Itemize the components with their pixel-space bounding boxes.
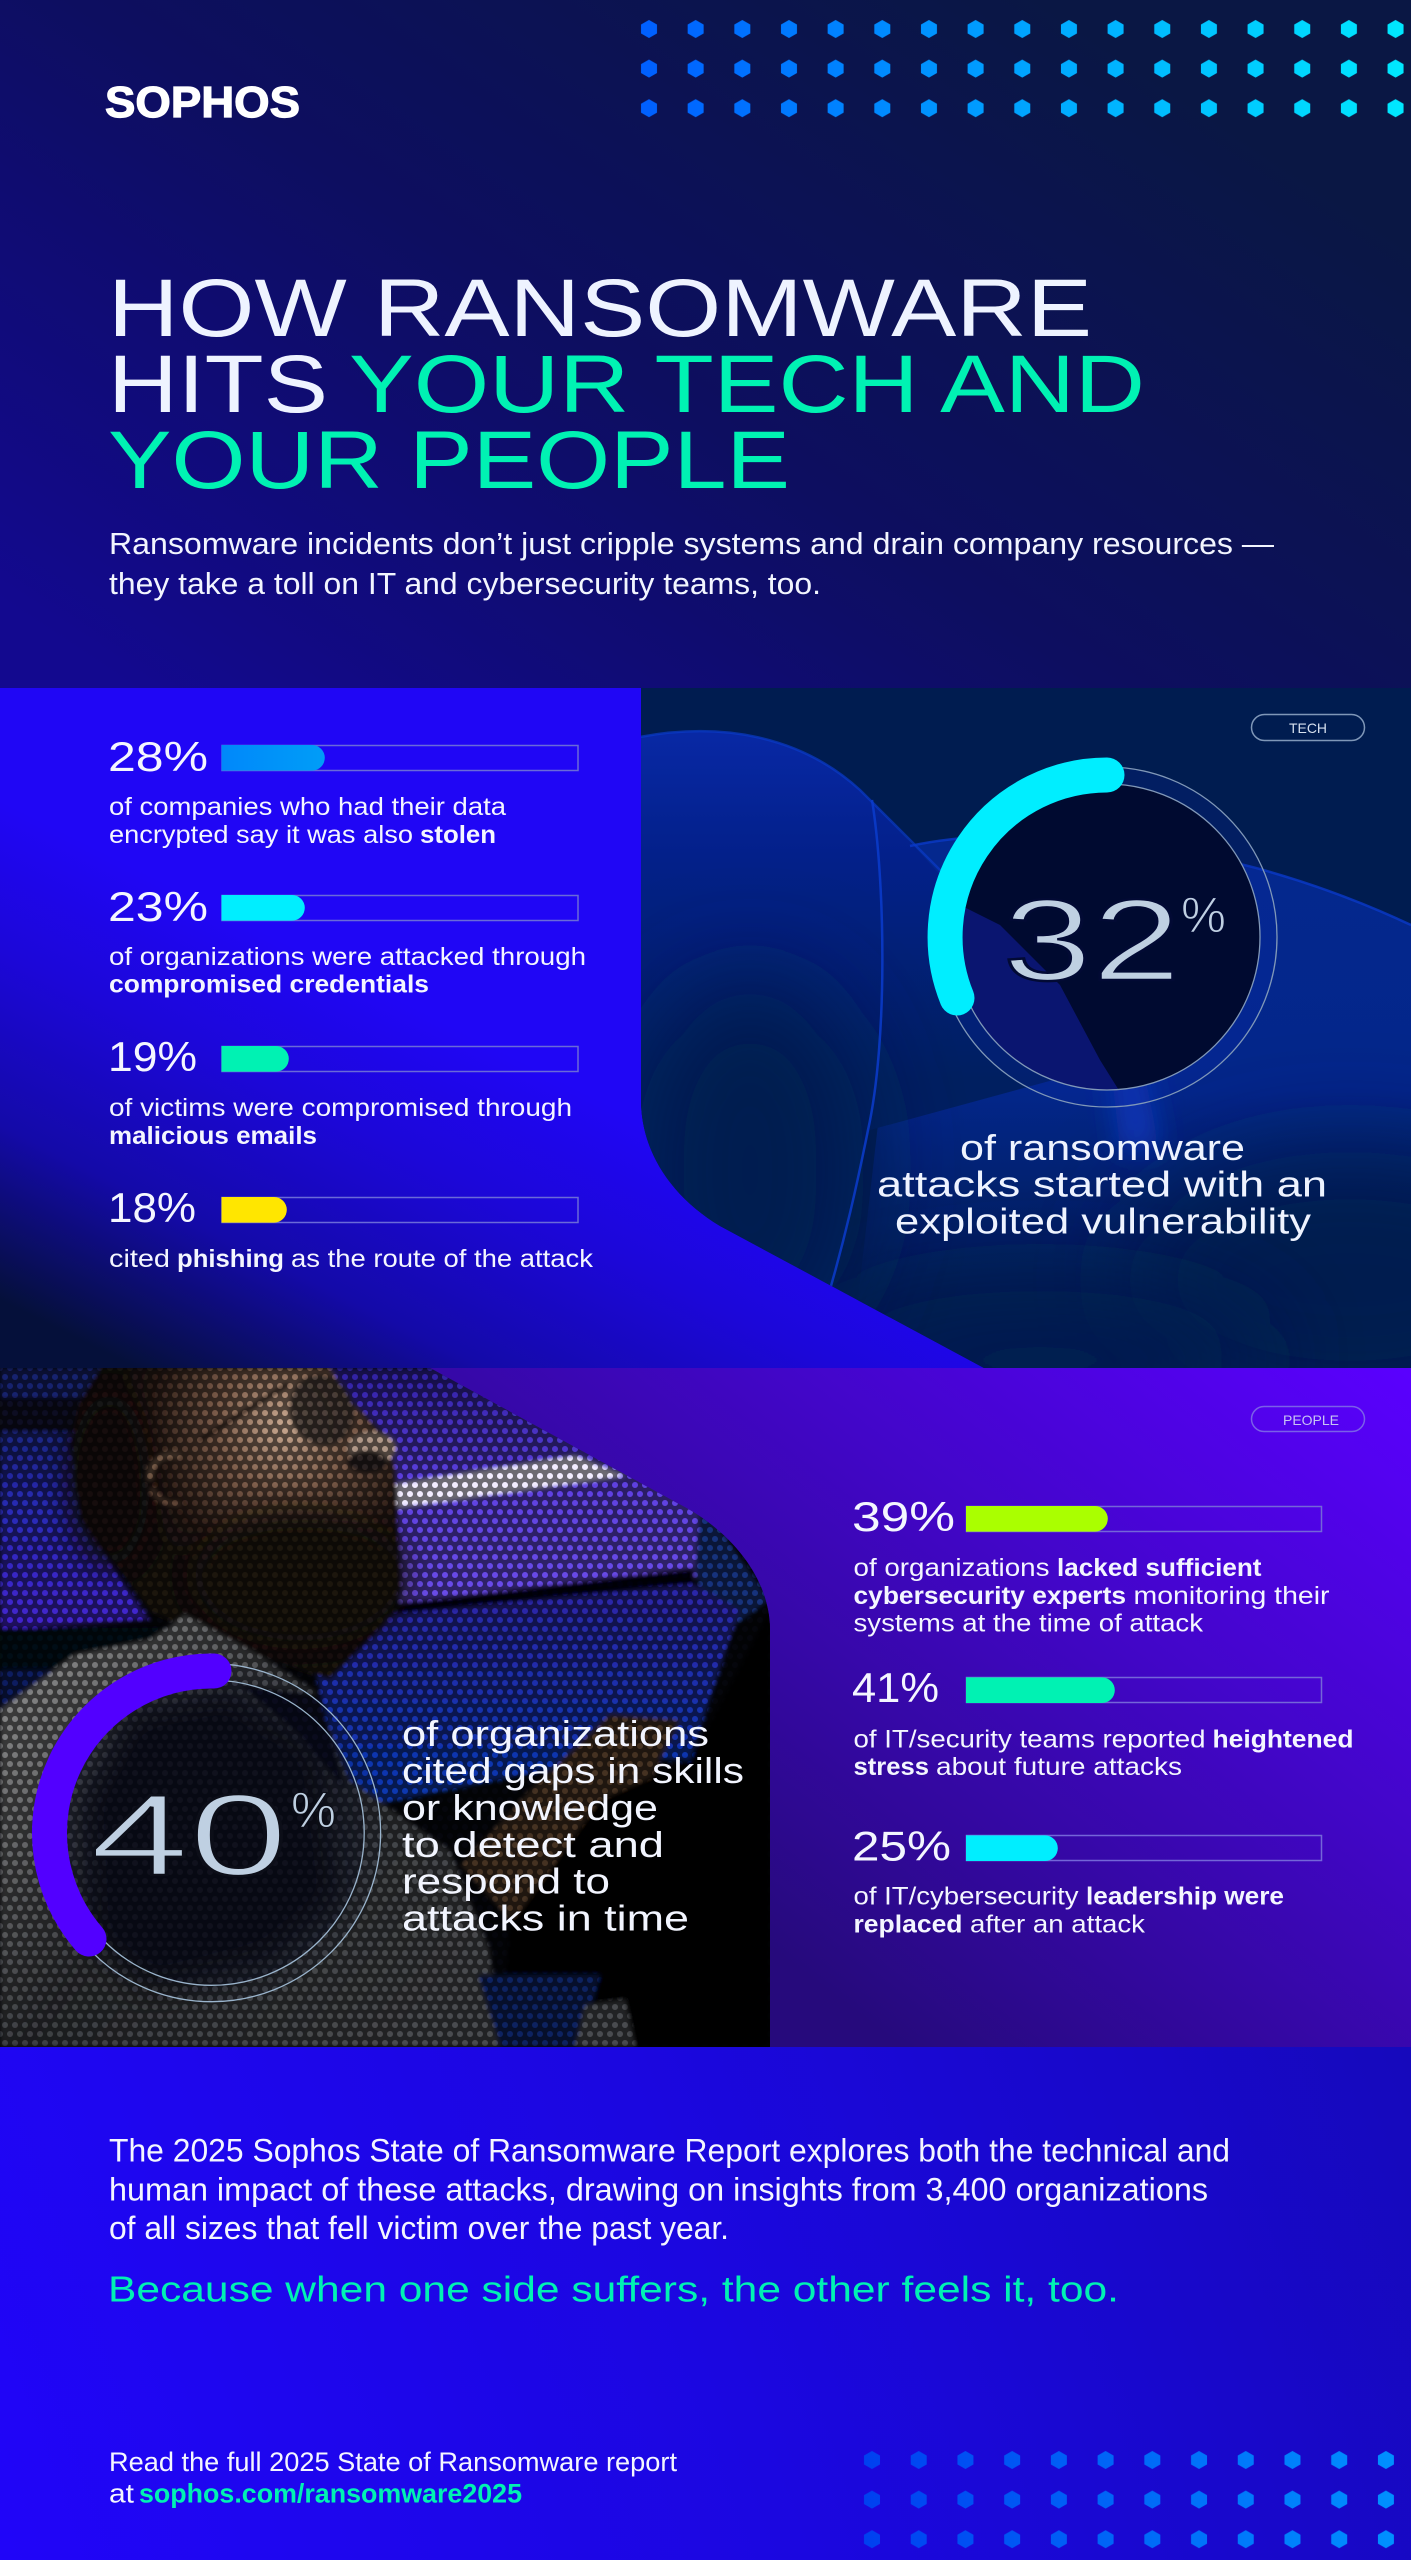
callout: 32% text	[877, 1127, 1327, 1242]
stat: 25% leadership: leadership were	[1086, 1882, 1284, 1910]
footer paragraph: human impact of these attacks, drawing on insights from 3,400 organizations	[109, 2172, 1208, 2208]
stat: 39% experts: 39%	[852, 1493, 955, 1540]
stat: 19% emails: 19%	[108, 1033, 197, 1080]
decorative hexagon dots bottom	[864, 2451, 1394, 2548]
footer background	[0, 2047, 1411, 2560]
stat: 28% stolen	[108, 733, 578, 849]
stat: 28% stolen: encrypted say it was also	[109, 821, 413, 849]
stat: 18% phishing: cited	[109, 1245, 170, 1273]
logo: Sophos: SOPHOS	[105, 78, 300, 127]
title: HOW RANSOMWARE	[108, 263, 1092, 354]
callout: 40% text	[402, 1713, 744, 1938]
callout: 32% text: of ransomware	[960, 1127, 1245, 1168]
people section background	[0, 1368, 1411, 2047]
stat: 23% credentials: compromised credentials	[109, 970, 429, 998]
subtitle: they take a toll on IT and cybersecurity teams, too.	[109, 566, 821, 601]
stat: 28% stolen: stolen	[420, 821, 496, 849]
donut chart: 40%	[43, 1664, 381, 2002]
stat: 39% experts: lacked sufficient	[1057, 1554, 1262, 1582]
stat: 19% emails	[108, 1033, 578, 1150]
stat: 39% experts: cybersecurity experts	[854, 1582, 1126, 1610]
stat: 19% emails: malicious emails	[109, 1122, 317, 1150]
tag: PEOPLE	[1252, 1406, 1364, 1432]
stat: 41% stress: 41%	[852, 1664, 939, 1711]
stat: 41% stress: of IT/security teams reported	[854, 1726, 1206, 1754]
tag: TECH	[1252, 714, 1364, 740]
tech section background	[0, 688, 1411, 1368]
stat: 25% leadership: replaced	[854, 1910, 962, 1938]
stat: 39% experts: monitoring their	[1134, 1582, 1330, 1610]
stat: 23% credentials	[108, 883, 586, 998]
stat: 41% stress	[852, 1664, 1354, 1781]
stat: 18% phishing: as the route of the attack	[291, 1245, 594, 1273]
title: YOUR TECH AND	[349, 339, 1145, 430]
footer paragraph: The 2025 Sophos State of Ransomware Report explores both the technical and	[109, 2132, 1230, 2168]
photo: man with glasses, halftone	[0, 1365, 770, 2047]
callout: 40% text: to detect and	[402, 1824, 664, 1865]
callout: 40% text: respond to	[402, 1860, 610, 1902]
subtitle	[109, 526, 1274, 601]
footer paragraph	[109, 2132, 1230, 2246]
call to action with link	[109, 2447, 677, 2508]
donut chart: 32%	[937, 767, 1277, 1107]
callout: 32% text: exploited vulnerability	[895, 1200, 1311, 1242]
stat: 41% stress: heightened	[1212, 1726, 1354, 1754]
callout: 32% text: attacks started with an	[877, 1164, 1327, 1204]
donut chart: 40%: 40	[90, 1770, 288, 1900]
stat: 25% leadership: after an attack	[970, 1910, 1146, 1938]
title: HITS	[108, 339, 328, 430]
footer tagline: Because when one side suffers, the other feels it, too.	[108, 2268, 1119, 2310]
stat: 28% stolen: of companies who had their data	[109, 793, 506, 821]
decorative hexagon dots top	[640, 20, 1404, 118]
stat: 23% credentials: 23%	[108, 883, 208, 930]
stat: 18% phishing: phishing	[177, 1245, 284, 1273]
stat: 28% stolen: 28%	[108, 733, 208, 780]
title: YOUR PEOPLE	[108, 415, 790, 506]
panel: tech background shape	[635, 688, 1411, 1430]
tag: TECH: TECH	[1289, 720, 1327, 736]
tag: PEOPLE: PEOPLE	[1283, 1412, 1339, 1428]
donut chart: 40%: %	[291, 1782, 336, 1838]
subtitle: Ransomware incidents don’t just cripple systems and drain company resources —	[109, 526, 1274, 561]
stat: 18% phishing	[108, 1184, 594, 1273]
donut chart: 32%: 32	[1003, 875, 1181, 1005]
stat: 39% experts: of organizations	[854, 1554, 1050, 1582]
header background	[0, 0, 1411, 688]
call to action with link: at	[109, 2478, 135, 2508]
stat: 25% leadership: of IT/cybersecurity	[854, 1882, 1079, 1910]
stat: 25% leadership	[852, 1822, 1322, 1938]
stat: 23% credentials: of organizations were attacked through	[109, 943, 586, 971]
call to action with link: sophos.com/ransomware2025	[139, 2478, 522, 2508]
callout: 40% text: or knowledge	[402, 1787, 658, 1828]
callout: 40% text: cited gaps in skills	[402, 1750, 744, 1791]
stat: 41% stress: stress	[854, 1753, 929, 1781]
call to action with link: Read the full 2025 State of Ransomware report	[109, 2447, 677, 2477]
callout: 40% text: of organizations	[402, 1713, 709, 1754]
footer paragraph: of all sizes that fell victim over the past year.	[109, 2210, 729, 2246]
donut chart: 32%: %	[1181, 887, 1226, 943]
stat: 18% phishing: 18%	[108, 1184, 196, 1231]
stat: 19% emails: of victims were compromised through	[109, 1094, 572, 1122]
callout: 40% text: attacks in time	[402, 1898, 689, 1938]
stat: 41% stress: about future attacks	[936, 1753, 1182, 1781]
stat: 25% leadership: 25%	[852, 1822, 951, 1870]
stat: 39% experts	[852, 1493, 1330, 1638]
stat: 39% experts: systems at the time of attack	[854, 1610, 1204, 1638]
title	[108, 263, 1145, 506]
